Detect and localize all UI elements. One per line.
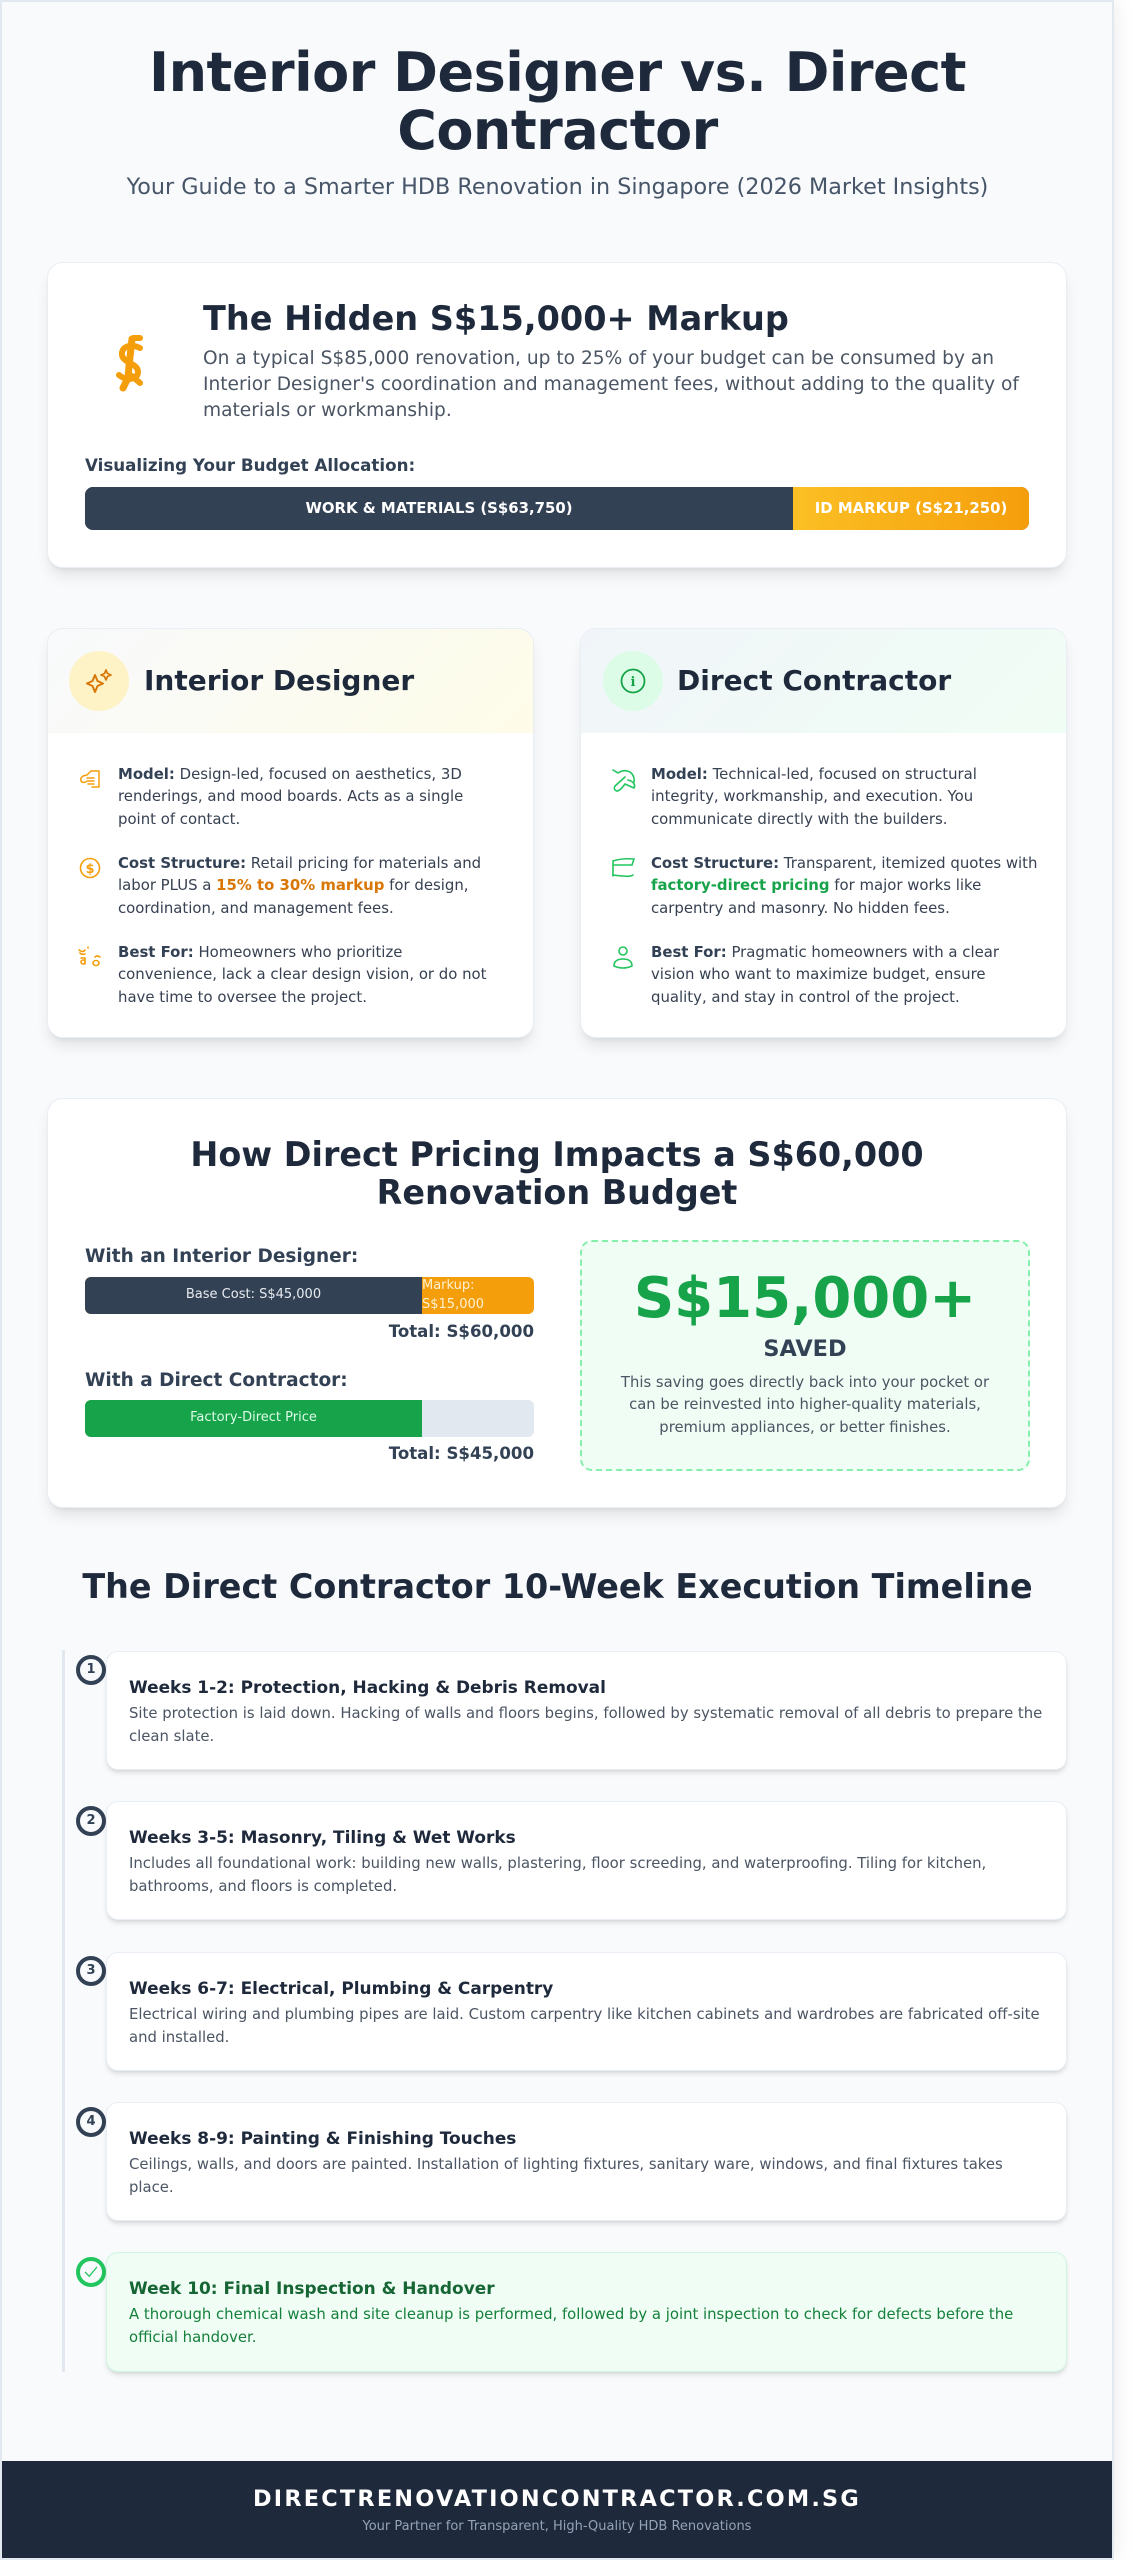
savings explanation: can be reinvested into higher-quality materials, bbox=[629, 1396, 981, 1413]
bar segment: ID markup: ID MARKUP (S$21,250) bbox=[815, 499, 1007, 517]
savings explanation: premium appliances, or better finishes. bbox=[659, 1419, 951, 1436]
text: model bbox=[118, 765, 463, 828]
heading: markup: The Hidden S$15,000+ Markup bbox=[203, 299, 789, 338]
savings label: SAVED bbox=[763, 1336, 847, 1362]
step 2 description: bathrooms, and floors is completed. bbox=[129, 1877, 397, 1895]
step 3 description: Electrical wiring and plumbing pipes are laid. Custom carpentry like kitchen cabinets and wardrobes are fabricated off-site bbox=[129, 2005, 1040, 2023]
label: with direct contractor: With a Direct Contractor: bbox=[85, 1370, 348, 1391]
total: direct contractor: Total: S$45,000 bbox=[389, 1444, 534, 1463]
icon: tools bbox=[612, 769, 636, 792]
step 5 marker bbox=[76, 2257, 106, 2287]
timeline bbox=[62, 1650, 65, 2372]
icon: person bbox=[613, 946, 633, 969]
text: cost structure: Cost Structure: Transparent, itemized quotes with bbox=[651, 854, 1037, 872]
bar segment: ID markup bbox=[793, 487, 1029, 530]
savings explanation bbox=[620, 1374, 990, 1436]
heading: pricing impact: How Direct Pricing Impacts a S$60,000 bbox=[190, 1135, 924, 1174]
label: with interior designer: With an Interior Designer: bbox=[85, 1246, 358, 1267]
savings amount: S$15,000+ bbox=[634, 1266, 976, 1331]
icon: best for bbox=[78, 946, 101, 966]
step 2 card bbox=[106, 1801, 1067, 1920]
step 5 description: A thorough chemical wash and site cleanup is performed, followed by a joint inspection to check for defects before the bbox=[129, 2305, 1013, 2323]
footer brand: DIRECTRENOVATIONCONTRACTOR.COM.SG bbox=[253, 2486, 861, 2512]
stacked bar: interior designer cost bbox=[85, 1277, 534, 1314]
subtitle: Your Guide to a Smarter HDB Renovation in Singapore (2026 Market Insights) bbox=[127, 174, 988, 200]
step 1 marker: 1 bbox=[86, 1662, 96, 1677]
callout: savings bbox=[580, 1240, 1030, 1471]
bar segment: markup: Markup: bbox=[422, 1278, 475, 1293]
panel header bbox=[48, 629, 535, 733]
icon: invoice bbox=[612, 858, 635, 878]
step 2 description: Includes all foundational work: building new walls, plastering, floor screeding, and waterproofing. Tiling for kitchen, bbox=[129, 1854, 986, 1872]
step 2 description bbox=[129, 1854, 986, 1895]
heading: interior designer: Interior Designer bbox=[144, 664, 414, 697]
bar segment: markup: S$15,000 bbox=[422, 1296, 484, 1312]
bar segment: work and materials: WORK & MATERIALS (S$63,750) bbox=[305, 499, 573, 517]
text: model: Model: Technical-led, focused on structural bbox=[651, 765, 977, 783]
text: best for: vision who want to maximize budget, ensure bbox=[651, 965, 986, 983]
savings explanation: This saving goes directly back into your pocket or bbox=[621, 1374, 989, 1391]
step 2 marker bbox=[76, 1806, 106, 1836]
text: model: renderings, and mood boards. Acts as a single bbox=[118, 787, 463, 805]
step 3 card bbox=[106, 1952, 1067, 2071]
step 5 description: official handover. bbox=[129, 2328, 256, 2346]
text: best for: quality, and stay in control of the project. bbox=[651, 988, 960, 1006]
text: model: integrity, workmanship, and execution. You bbox=[651, 787, 973, 805]
text: best for bbox=[118, 943, 486, 1006]
bar segment: factory-direct price bbox=[85, 1400, 422, 1437]
step 3 description: and installed. bbox=[129, 2028, 229, 2046]
text: best for bbox=[651, 943, 999, 1006]
panel: hidden markup bbox=[47, 262, 1067, 568]
icon: info: i bbox=[631, 675, 636, 690]
text: best for: Best For: Pragmatic homeowners with a clear bbox=[651, 943, 999, 961]
text: model: Model: Design-led, focused on aesthetics, 3D bbox=[118, 765, 462, 783]
step 4 card bbox=[106, 2102, 1067, 2221]
text: cost structure: factory-direct pricing for major works like bbox=[651, 876, 981, 894]
bar segment: markup bbox=[422, 1278, 484, 1312]
step 4 marker: 4 bbox=[86, 2114, 96, 2129]
bar segment: base cost: Base Cost: S$45,000 bbox=[186, 1287, 321, 1302]
bar segment: factory-direct price: Factory-Direct Price bbox=[190, 1410, 317, 1425]
step 1 description: Site protection is laid down. Hacking of walls and floors begins, followed by systematic removal of all debris to prepare the bbox=[129, 1704, 1042, 1722]
text: markup explanation bbox=[203, 348, 1020, 420]
panel: direct contractor bbox=[580, 628, 1067, 1038]
step 3 marker: 3 bbox=[86, 1963, 96, 1978]
step 4 description: place. bbox=[129, 2178, 174, 2196]
heading: pricing impact bbox=[190, 1135, 924, 1212]
footer bbox=[2, 2461, 1112, 2558]
step 1 title: Weeks 1-2: Protection, Hacking & Debris Removal bbox=[129, 1677, 606, 1697]
text: model bbox=[651, 765, 977, 828]
text: markup explanation: materials or workmanship. bbox=[203, 400, 452, 420]
step 1 card bbox=[106, 1651, 1067, 1770]
total: interior designer: Total: S$60,000 bbox=[389, 1322, 534, 1341]
text: cost structure bbox=[118, 854, 481, 917]
footer tagline: Your Partner for Transparent, High-Quality HDB Renovations bbox=[363, 2519, 751, 2534]
heading: pricing impact: Renovation Budget bbox=[377, 1173, 737, 1212]
step 5 description bbox=[129, 2305, 1013, 2346]
step 2 marker: 2 bbox=[86, 1813, 96, 1828]
step 1 description bbox=[129, 1704, 1042, 1745]
step 2 title: Weeks 3-5: Masonry, Tiling & Wet Works bbox=[129, 1827, 516, 1847]
icon: drafting hand bbox=[80, 770, 100, 788]
bar segment: work and materials bbox=[85, 487, 793, 530]
heading: direct contractor: Direct Contractor bbox=[677, 664, 951, 697]
step 1 marker bbox=[76, 1655, 106, 1685]
heading: timeline: The Direct Contractor 10-Week Execution Timeline bbox=[82, 1567, 1033, 1606]
label: budget allocation: Visualizing Your Budget Allocation: bbox=[85, 455, 415, 475]
text: cost structure: carpentry and masonry. No hidden fees. bbox=[651, 899, 950, 917]
step 1 description: clean slate. bbox=[129, 1727, 214, 1745]
text: best for: convenience, lack a clear design vision, or do not bbox=[118, 965, 486, 983]
icon: dollar sign bbox=[116, 335, 143, 392]
title: Interior Designer vs. Direct bbox=[149, 41, 966, 104]
step 4 title: Weeks 8-9: Painting & Finishing Touches bbox=[129, 2128, 516, 2148]
title: Contractor bbox=[397, 99, 718, 162]
step 4 marker bbox=[76, 2107, 106, 2137]
title bbox=[149, 41, 966, 162]
step 4 description bbox=[129, 2155, 1003, 2196]
text: cost structure: coordination, and management fees. bbox=[118, 899, 394, 917]
text: cost structure: Cost Structure: Retail pricing for materials and bbox=[118, 854, 481, 872]
step 3 description bbox=[129, 2005, 1040, 2046]
panel: direct pricing impact bbox=[47, 1098, 1067, 1508]
step 5 card bbox=[106, 2252, 1067, 2372]
step 3 marker bbox=[76, 1956, 106, 1986]
text: model: point of contact. bbox=[118, 810, 240, 828]
icon: sparkles bbox=[69, 651, 129, 711]
step 3 title: Weeks 6-7: Electrical, Plumbing & Carpentry bbox=[129, 1978, 553, 1998]
icon: info bbox=[603, 651, 663, 711]
text: markup explanation: On a typical S$85,000 renovation, up to 25% of your budget can be consumed by an bbox=[203, 348, 994, 368]
icon: dollar coin: $ bbox=[85, 862, 95, 877]
text: best for: have time to oversee the project. bbox=[118, 988, 367, 1006]
text: markup explanation: Interior Designer's coordination and management fees, without adding to the quality of bbox=[203, 374, 1019, 394]
icon: check bbox=[84, 2266, 98, 2278]
step 4 description: Ceilings, walls, and doors are painted. Installation of lighting fixtures, sanitary ware, windows, and final fixtures takes bbox=[129, 2155, 1003, 2173]
panel header bbox=[581, 629, 1068, 733]
step 5 title: Week 10: Final Inspection & Handover bbox=[129, 2278, 495, 2298]
timeline rail bbox=[62, 1650, 65, 2372]
bar segment: base cost bbox=[85, 1277, 422, 1314]
icon: dollar coin bbox=[80, 858, 100, 878]
stacked bar: budget allocation bbox=[85, 487, 1029, 530]
text: model: communicate directly with the builders. bbox=[651, 810, 948, 828]
stacked bar: direct contractor cost bbox=[85, 1400, 534, 1437]
text: cost structure: labor PLUS a 15% to 30% markup for design, bbox=[118, 876, 468, 894]
text: best for: Best For: Homeowners who prioritize bbox=[118, 943, 402, 961]
text: cost structure bbox=[651, 854, 1037, 917]
panel: interior designer bbox=[47, 628, 534, 1038]
